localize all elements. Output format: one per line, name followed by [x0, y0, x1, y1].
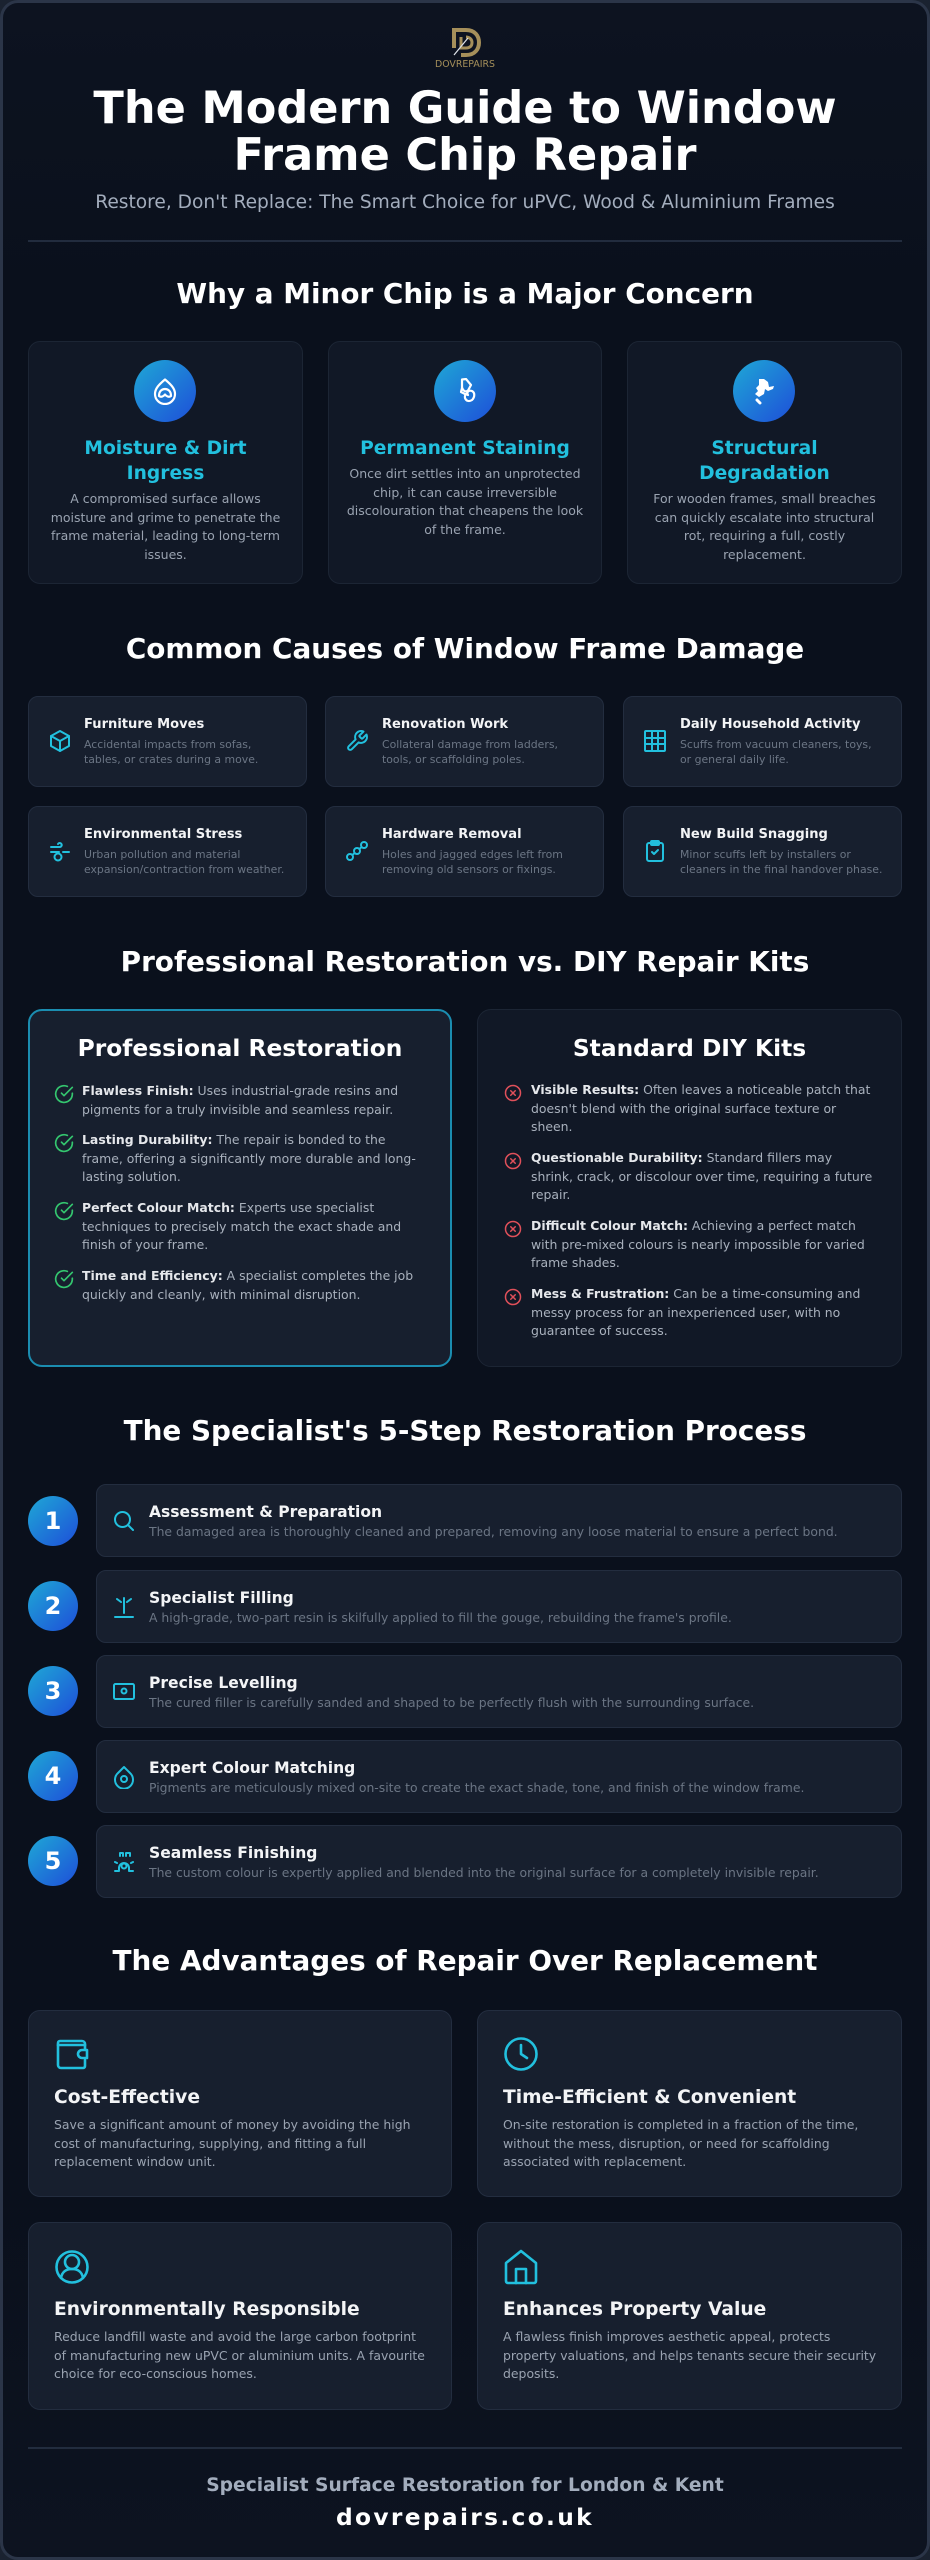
panel: hardware removal: [325, 806, 604, 897]
card title: Ingress: [127, 462, 204, 484]
panel: environmentally responsible: Reduce landfill waste and avoid the large carbon footprint: [54, 2329, 416, 2344]
icon: box: [50, 730, 70, 752]
list item: time and efficiency: Time and Efficiency: A specialist completes the job: [82, 1268, 413, 1283]
step 3 number: [28, 1666, 78, 1716]
icon: cross: [504, 1084, 522, 1102]
icon: colour drop: [114, 1766, 134, 1789]
icon: chain: [346, 841, 368, 861]
panel: environmentally responsible: of manufacturing new uPVC or aluminium units. A favourite: [54, 2348, 425, 2363]
panel: furniture moves: Accidental impacts from sofas,: [84, 738, 251, 751]
list item: flawless finish: pigments for a truly invisible and seamless repair.: [82, 1102, 393, 1117]
step 4 number: 4: [45, 1762, 61, 1790]
card title: Structural: [711, 438, 818, 458]
list item: difficult colour match: with pre-mixed colours is nearly impossible for varied: [531, 1237, 865, 1252]
icon: clock: [504, 2037, 538, 2071]
card text: replacement.: [723, 547, 806, 562]
list item: mess and frustration: messy process for an inexperienced user, with no: [531, 1305, 840, 1320]
heading: advantages: The Advantages of Repair Over Replacement: [113, 1944, 817, 1977]
panel: daily household activity: or general daily life.: [680, 753, 789, 766]
heading: common causes: Common Causes of Window Frame Damage: [126, 632, 804, 665]
step text: Specialist Filling: [149, 1589, 294, 1607]
step 2 card: [96, 1570, 902, 1643]
step text: Seamless Finishing: [149, 1844, 317, 1862]
panel: enhances property value: [477, 2222, 902, 2410]
list item: questionable durability: [531, 1150, 872, 1202]
advantage text: Time-Efficient & Convenient: [503, 2087, 796, 2108]
step 4 number: [28, 1751, 78, 1801]
icon: house: [504, 2250, 538, 2284]
panel: furniture moves: [28, 696, 307, 787]
title: The Modern Guide to Window: [93, 82, 837, 134]
panel: permanent staining: [328, 341, 602, 584]
text: Environmental Stress: [84, 827, 242, 842]
panel: new build snagging: Minor scuffs left by installers or: [680, 848, 851, 861]
text: New Build Snagging: [680, 827, 828, 842]
list item: mess and frustration: Mess & Frustration: Can be a time-consuming and: [531, 1286, 860, 1301]
panel: environmental stress: [28, 806, 307, 897]
logo: Dovrepairs: DOVREPAIRS: [435, 59, 495, 70]
title: Frame Chip Repair: [233, 129, 696, 181]
heading: 5-step process: The Specialist's 5-Step Restoration Process: [124, 1414, 806, 1447]
card text: can quickly escalate into structural: [655, 510, 874, 525]
step 2 number: 2: [45, 1592, 61, 1620]
heading: professional vs DIY: Professional Restoration vs. DIY Repair Kits: [121, 945, 809, 978]
list item: lasting durability: Lasting Durability: The repair is bonded to the: [82, 1132, 386, 1147]
icon: wallet: [56, 2040, 88, 2070]
panel: standard DIY kits: [477, 1009, 902, 1367]
panel: time-efficient: [477, 2010, 902, 2197]
panel: new build snagging: cleaners in the final handover phase.: [680, 863, 882, 876]
panel: cost-effective: cost of manufacturing, supplying, and fitting a full: [54, 2136, 366, 2151]
panel: enhances property value: A flawless finish improves aesthetic appeal, protects: [503, 2329, 830, 2344]
icon: check: [54, 1084, 74, 1104]
card text: chip, it can cause irreversible: [373, 485, 557, 500]
advantage text: Cost-Effective: [54, 2087, 200, 2108]
text: Daily Household Activity: [680, 717, 860, 732]
icon: check: [54, 1202, 74, 1220]
panel heading: Professional Restoration: [78, 1034, 402, 1062]
step 4 card: [96, 1740, 902, 1813]
text: Hardware Removal: [382, 827, 522, 842]
heading: why a minor chip: Why a Minor Chip is a Major Concern: [176, 277, 754, 310]
panel: structural degradation: [627, 341, 902, 584]
step 2 number: [28, 1581, 78, 1631]
step 3 card: The cured filler is carefully sanded and shaped to be perfectly flush with the surrounding surface.: [149, 1695, 754, 1710]
step 5 card: [96, 1825, 902, 1898]
panel: cost-effective: replacement window unit.: [54, 2154, 216, 2169]
list item: difficult colour match: frame shades.: [531, 1255, 620, 1270]
icon: cross: [504, 1288, 522, 1306]
card text: rot, requiring a full, costly: [684, 528, 845, 543]
panel: time-efficient: associated with replacement.: [503, 2154, 686, 2169]
step 1 card: The damaged area is thoroughly cleaned and prepared, removing any loose material to ensure a perfect bond.: [149, 1524, 838, 1539]
card title: Moisture & Dirt: [84, 438, 247, 458]
panel: moisture and dirt ingress: [28, 341, 303, 584]
list item: perfect colour match: Perfect Colour Match: Experts use specialist: [82, 1200, 374, 1215]
icon: filling: [114, 1597, 134, 1618]
icon: wind: [50, 842, 70, 862]
list item: visible results: [531, 1082, 870, 1134]
list item: visible results: sheen.: [531, 1119, 573, 1134]
list item: mess and frustration: guarantee of success.: [531, 1323, 668, 1338]
list item: flawless finish: Flawless Finish: Uses industrial-grade resins and: [82, 1083, 398, 1098]
step text: Assessment & Preparation: [149, 1503, 382, 1521]
advantage text: Enhances Property Value: [503, 2299, 766, 2320]
panel: professional restoration: [28, 1009, 452, 1367]
card title: Degradation: [699, 462, 830, 484]
panel: daily household activity: [623, 696, 902, 787]
card text: Once dirt settles into an unprotected: [349, 466, 581, 481]
icon: hammer: [733, 360, 795, 422]
list item: lasting durability: [82, 1132, 416, 1184]
list item: perfect colour match: finish of your frame.: [82, 1237, 208, 1252]
list item: time and efficiency: quickly and cleanly, with minimal disruption.: [82, 1287, 360, 1302]
card text: issues.: [144, 547, 187, 562]
list item: flawless finish: [82, 1083, 398, 1117]
step text: Expert Colour Matching: [149, 1759, 355, 1777]
list item: difficult colour match: Difficult Colour Match: Achieving a perfect match: [531, 1218, 856, 1233]
icon: grid: [644, 730, 666, 752]
list item: questionable durability: Questionable Durability: Standard fillers may: [531, 1150, 832, 1165]
logo: Dovrepairs: [435, 28, 495, 70]
list item: visible results: Visible Results: Often leaves a noticeable patch that: [531, 1082, 870, 1097]
icon: stain: [434, 360, 496, 422]
step 1 number: 1: [45, 1507, 61, 1535]
list item: questionable durability: repair.: [531, 1187, 570, 1202]
card text: [347, 466, 583, 537]
list item: time and efficiency: [82, 1268, 413, 1302]
icon: clipboard: [646, 840, 664, 862]
panel: hardware removal: Holes and jagged edges left from: [382, 848, 563, 861]
panel: cost-effective: Save a significant amount of money by avoiding the high: [54, 2117, 411, 2132]
panel: renovation work: [325, 696, 604, 787]
step 4 card: Pigments are meticulously mixed on-site to create the exact shade, tone, and finish of the window frame.: [149, 1780, 804, 1795]
panel: furniture moves: tables, or crates during a move.: [84, 753, 258, 766]
list item: perfect colour match: [82, 1200, 401, 1252]
step 1 card: [96, 1484, 902, 1557]
step 1 number: [28, 1496, 78, 1546]
footer tagline: Specialist Surface Restoration for London & Kent: [206, 2475, 724, 2496]
title: [93, 82, 837, 181]
panel: environmental stress: expansion/contraction from weather.: [84, 863, 284, 876]
step 5 number: [28, 1836, 78, 1886]
icon: wrench: [347, 730, 368, 751]
card text: [653, 491, 876, 562]
footer website: dovrepairs.co.uk: [336, 2503, 594, 2531]
advantage text: Environmentally Responsible: [54, 2299, 360, 2320]
icon: cross: [504, 1220, 522, 1238]
card text: moisture and grime to penetrate the: [51, 510, 280, 525]
icon: person in circle: [55, 2250, 89, 2284]
panel: enhances property value: deposits.: [503, 2366, 559, 2381]
panel: new build snagging: [623, 806, 902, 897]
panel: cost-effective: [28, 2010, 452, 2197]
step 5 number: 5: [45, 1847, 61, 1875]
step 3 card: [96, 1655, 902, 1728]
card text: A compromised surface allows: [70, 491, 261, 506]
list item: difficult colour match: [531, 1218, 865, 1270]
step text: Precise Levelling: [149, 1674, 298, 1692]
text: Furniture Moves: [84, 717, 204, 732]
text: Renovation Work: [382, 717, 508, 732]
panel: enhances property value: property valuations, and helps tenants secure their security: [503, 2348, 876, 2363]
panel heading: Standard DIY Kits: [573, 1034, 806, 1062]
icon: finishing: [114, 1852, 134, 1872]
card text: discolouration that cheapens the look: [347, 503, 583, 518]
panel: renovation work: tools, or scaffolding poles.: [382, 753, 525, 766]
panel: renovation work: Collateral damage from ladders,: [382, 738, 558, 751]
icon: search: [114, 1511, 134, 1531]
step 3 number: 3: [45, 1677, 61, 1705]
step 2 card: A high-grade, two-part resin is skilfully applied to fill the gouge, rebuilding the frame's profile.: [149, 1610, 732, 1625]
panel: environmentally responsible: choice for eco-conscious homes.: [54, 2366, 257, 2381]
list item: perfect colour match: techniques to precisely match the exact shade and: [82, 1219, 401, 1234]
list item: mess and frustration: [531, 1286, 860, 1338]
panel: time-efficient: without the mess, disruption, or need for scaffolding: [503, 2136, 830, 2151]
panel: time-efficient: On-site restoration is completed in a fraction of the time,: [503, 2117, 858, 2132]
icon: cross: [504, 1152, 522, 1170]
card title: [84, 438, 247, 484]
card title: Permanent Staining: [360, 438, 570, 458]
subtitle: Restore, Don't Replace: The Smart Choice for uPVC, Wood & Aluminium Frames: [95, 192, 835, 212]
list item: visible results: doesn't blend with the original surface texture or: [531, 1101, 836, 1116]
icon: water drop: [134, 360, 196, 422]
panel: environmental stress: Urban pollution and material: [84, 848, 240, 861]
panel: daily household activity: Scuffs from vacuum cleaners, toys,: [680, 738, 872, 751]
panel: hardware removal: removing old sensors or fixings.: [382, 863, 556, 876]
card text: frame material, leading to long-term: [51, 528, 280, 543]
icon: check: [54, 1134, 74, 1152]
list item: questionable durability: shrink, crack, or discolour over time, requiring a future: [531, 1169, 872, 1184]
list item: lasting durability: lasting solution.: [82, 1169, 181, 1184]
icon: level: [113, 1683, 135, 1700]
card text: [51, 491, 280, 562]
step 5 card: The custom colour is expertly applied and blended into the original surface for a completely invisible repair.: [149, 1865, 819, 1880]
card text: of the frame.: [424, 522, 506, 537]
card title: [699, 438, 830, 484]
list item: lasting durability: frame, offering a significantly more durable and long-: [82, 1151, 416, 1166]
card text: For wooden frames, small breaches: [653, 491, 876, 506]
panel: environmentally responsible: [28, 2222, 452, 2410]
icon: check: [54, 1270, 74, 1288]
